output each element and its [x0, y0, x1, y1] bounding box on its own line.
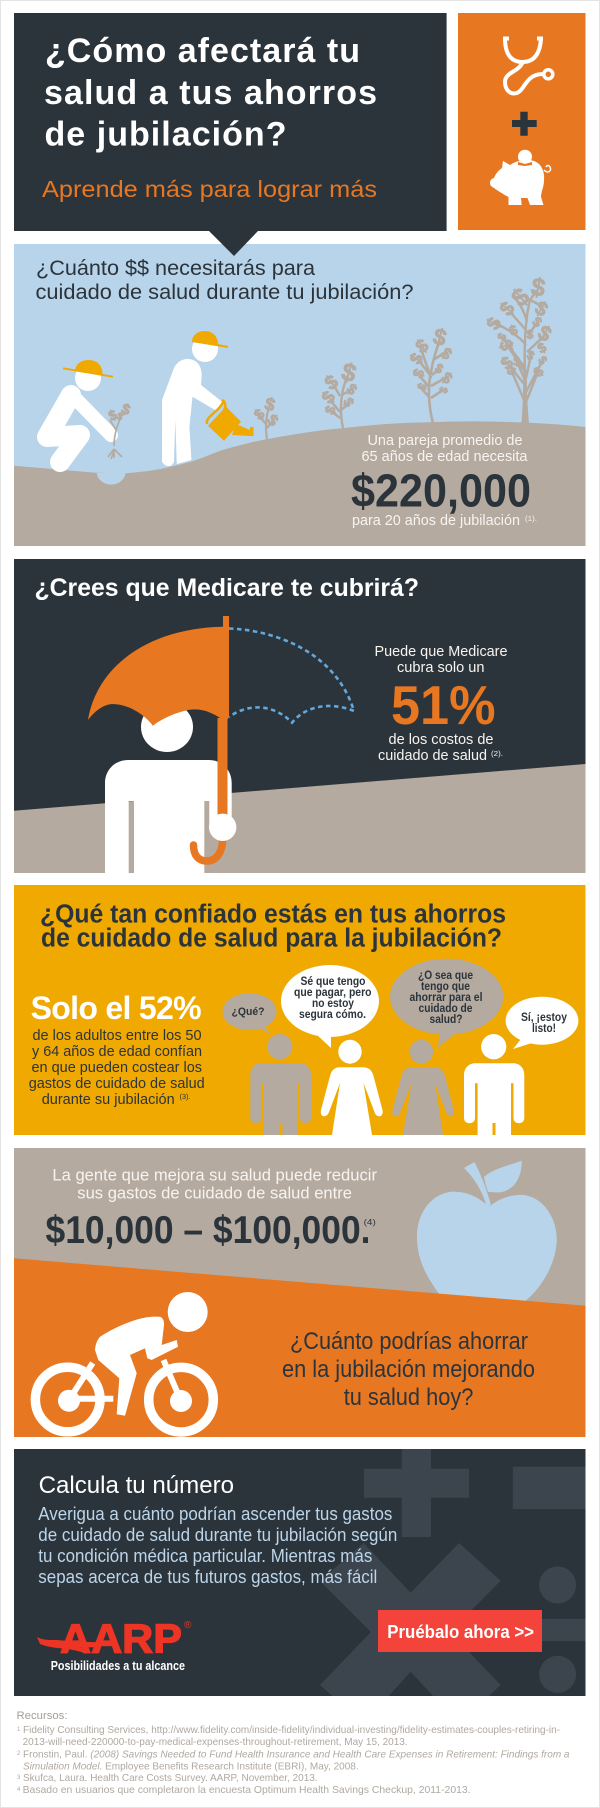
speech bubble 4: listo! — [532, 1023, 556, 1035]
money tree 4: $ — [494, 330, 510, 343]
question text: en la jubilación mejorando — [282, 1356, 535, 1383]
stat: 51%: cuidado de salud — [378, 747, 487, 764]
ground band — [14, 764, 586, 873]
figure: crouching gardener — [47, 360, 113, 462]
money tree 3: $ — [406, 349, 427, 367]
money tree 4: $ — [497, 352, 517, 374]
speech bubble 3: salud? — [430, 1014, 462, 1026]
stat: 52%: gastos de cuidado de salud — [29, 1075, 205, 1092]
sources: 1 — [17, 1727, 21, 1733]
money tree 1: $ — [263, 412, 281, 430]
orange band — [14, 1258, 586, 1437]
stat: 52% — [29, 990, 205, 1108]
speech bubble 3: ¿O sea que — [418, 970, 473, 982]
money tree 4: $ — [535, 353, 550, 368]
figure: man 2 — [464, 1034, 524, 1135]
title: salud a tus ahorros — [44, 74, 377, 112]
speech bubble 2: Sé que tengo — [300, 976, 366, 988]
icon: plus — [512, 112, 537, 136]
sources: Fidelity Consulting Services, http://www.fidelity.com/inside-fidelity/individual-investing/fidelity-estimates-couples-retiring-in- — [23, 1724, 560, 1736]
money tree 4: $ — [513, 354, 520, 368]
panel: icons — [458, 13, 586, 230]
question heading: cuidado de salud durante tu jubilación? — [36, 281, 414, 304]
logo: AARP: Posibilidades a tu alcance — [51, 1658, 185, 1673]
money tree 2 — [317, 358, 361, 428]
sources: Skufca, Laura. Health Care Costs Survey. AARP, November, 2013. — [23, 1772, 318, 1784]
stat: 52%: Solo el 52% — [31, 990, 202, 1026]
sources: Simulation Model. Employee Benefits Research Institute (EBRI), May, 2008. — [23, 1760, 359, 1772]
money tree 3: $ — [437, 345, 455, 364]
speech bubble 4: Sí, ¡estoy — [521, 1012, 568, 1024]
panel: calculate your number — [14, 1449, 586, 1696]
speech bubble 3 — [390, 959, 503, 1048]
figure: woman 2 — [392, 1040, 454, 1135]
icon: piggy bank — [490, 150, 551, 205]
money tree 4: $ — [531, 297, 551, 322]
logo: AARP: ® — [184, 1620, 192, 1631]
question heading: ¿Cuánto $$ necesitarás para — [36, 257, 315, 280]
figure: man 1 — [250, 1034, 311, 1135]
money tree 3: $ — [438, 385, 451, 395]
money tree 1: $ — [262, 394, 277, 415]
savings text: sus gastos de cuidado de salud entre — [77, 1185, 352, 1203]
stat: 52%: y 64 años de edad confían — [32, 1043, 202, 1060]
sources: 3 — [17, 1775, 21, 1781]
header panel: title — [14, 13, 447, 256]
seedling with roots: $ — [115, 411, 125, 423]
heading — [40, 901, 506, 953]
speech bubble 2: no estoy — [312, 998, 355, 1010]
planting hole — [97, 473, 126, 485]
speech bubble 1: ¿Qué? — [232, 1006, 265, 1018]
money tree 2: $ — [321, 371, 343, 395]
ground hill — [14, 421, 586, 546]
money tree 3: $ — [414, 380, 430, 393]
money tree 3: $ — [438, 369, 455, 388]
sources: 2013-will-need-220000-to-pay-medical-expenses-throughout-retirement, May 15, 2013. — [23, 1736, 408, 1748]
money tree 4 — [483, 273, 556, 423]
speech bubble 3: tengo que — [421, 981, 470, 993]
stat: 52%: en que pueden costear los — [32, 1059, 202, 1076]
sources — [16, 1710, 570, 1796]
panel: Medicare — [14, 559, 586, 873]
speech bubble 3: cuidado de — [418, 1003, 472, 1015]
money tree 2: $ — [343, 380, 361, 399]
figure: woman 1 — [321, 1040, 383, 1135]
speech bubble 4 — [506, 997, 578, 1049]
money tree 2: $ — [317, 387, 339, 408]
description: tu condición médica particular. Mientras más — [38, 1545, 372, 1566]
money tree 4: $ — [529, 313, 546, 330]
seedling with roots — [106, 400, 133, 459]
stat: 52%: durante su jubilación — [42, 1091, 175, 1108]
money tree 4: $ — [496, 298, 520, 320]
stat: 51% — [374, 643, 508, 764]
question text: ¿Cuánto podrías ahorrar — [290, 1328, 528, 1355]
sources: 2 — [17, 1751, 21, 1757]
money tree 4: $ — [524, 348, 537, 363]
sources: Basado en usuarios que completaron la encuesta Optimum Health Savings Checkup, 2011-2013. — [23, 1784, 471, 1796]
background math symbols — [320, 1449, 586, 1696]
money tree 3: $ — [412, 335, 433, 358]
speech bubble 1 — [222, 993, 276, 1034]
sources: 4 — [17, 1787, 21, 1793]
question text — [282, 1328, 535, 1411]
money tree 1: $ — [251, 405, 269, 424]
stat: 51%: (2). — [491, 751, 503, 758]
money tree 4: $ — [504, 364, 519, 378]
heading: ¿Crees que Medicare te cubrirá? — [34, 574, 419, 602]
money tree 4: $ — [495, 337, 517, 353]
savings text: $10,000 – $100,000. — [46, 1209, 370, 1252]
figure: cyclist — [35, 1292, 213, 1432]
icon: apple — [417, 1161, 557, 1302]
money tree 2: $ — [340, 395, 358, 410]
description — [38, 1503, 397, 1587]
heading: de cuidado de salud para la jubilación? — [41, 925, 502, 953]
title: ¿Cómo afectará tu — [45, 32, 360, 70]
button — [378, 1610, 542, 1652]
heading: Calcula tu número — [39, 1472, 234, 1499]
money tree 4: $ — [530, 363, 547, 380]
stat: 51%: cubra solo un — [397, 659, 484, 676]
dotted missing half of umbrella — [229, 628, 354, 723]
title: de jubilación? — [44, 116, 286, 154]
stat: 52%: (3). — [180, 1094, 191, 1101]
stat: $220,000: (1). — [525, 516, 537, 523]
logo: AARP — [37, 1616, 192, 1673]
speech bubble 2 — [281, 965, 379, 1048]
money tree 4: $ — [483, 314, 506, 334]
figure: standing gardener with watering can — [162, 331, 254, 466]
money tree 4: $ — [534, 321, 556, 347]
description: Averigua a cuánto podrían ascender tus gastos — [38, 1503, 392, 1524]
button: Pruébalo ahora >> — [387, 1622, 534, 1642]
logo: AARP: AARP — [60, 1616, 182, 1662]
sources: Recursos: — [16, 1710, 68, 1722]
money tree 4: $ — [534, 339, 549, 357]
money tree 4: $ — [507, 321, 520, 339]
heading: ¿Qué tan confiado estás en tus ahorros — [40, 901, 506, 929]
money tree 2: $ — [338, 358, 359, 388]
money tree 3 — [406, 323, 455, 423]
question heading — [36, 257, 414, 304]
stat: 52%: de los adultos entre los 50 — [32, 1027, 202, 1044]
description: de cuidado de salud durante tu jubilación según — [38, 1524, 397, 1545]
savings text: La gente que mejora su salud puede reducir — [52, 1167, 378, 1185]
seedling with roots: $ — [106, 406, 120, 424]
money tree 2: $ — [321, 403, 339, 417]
money tree 3: $ — [430, 323, 450, 351]
panel: improve health — [14, 1148, 586, 1437]
stat: $220,000 — [351, 432, 537, 529]
panel: confidence — [14, 885, 586, 1135]
money tree 3: $ — [410, 366, 429, 381]
stat: 51%: de los costos de — [388, 731, 494, 748]
stat: $220,000: Una pareja promedio de — [368, 432, 522, 449]
speech bubble 3: ahorrar para el — [410, 992, 482, 1004]
sources: Fronstin, Paul. (2008) Savings Needed to Fund Health Insurance and Health Care Expenses in Retirement: Findings from a — [23, 1748, 570, 1760]
money tree 3: $ — [432, 360, 447, 377]
savings text — [46, 1167, 378, 1252]
savings text: (4) — [364, 1218, 376, 1227]
stat: $220,000: $220,000 — [351, 465, 531, 517]
seedling with roots: $ — [119, 400, 133, 419]
money tree 1 — [251, 394, 281, 440]
subtitle: Aprende más para lograr más — [42, 176, 377, 202]
stat: $220,000: 65 años de edad necesita — [362, 448, 528, 465]
question text: tu salud hoy? — [344, 1384, 473, 1411]
stat: 51%: 51% — [391, 674, 496, 736]
speech bubble 2: segura cómo. — [299, 1009, 366, 1021]
money tree 4: $ — [506, 282, 535, 313]
icon: stethoscope — [503, 38, 553, 94]
title — [44, 32, 377, 154]
stat: 51%: Puede que Medicare — [374, 643, 508, 660]
money tree 4: $ — [529, 273, 547, 303]
stat: $220,000: para 20 años de jubilación — [352, 512, 520, 529]
speech bubble 2: que pagar, pero — [294, 987, 372, 999]
panel: how much will you need — [14, 244, 586, 546]
money tree 4: $ — [527, 327, 534, 341]
description: sepas acerca de tus futuros gastos, más fácil — [38, 1566, 377, 1587]
figure: person with half umbrella — [88, 616, 354, 873]
